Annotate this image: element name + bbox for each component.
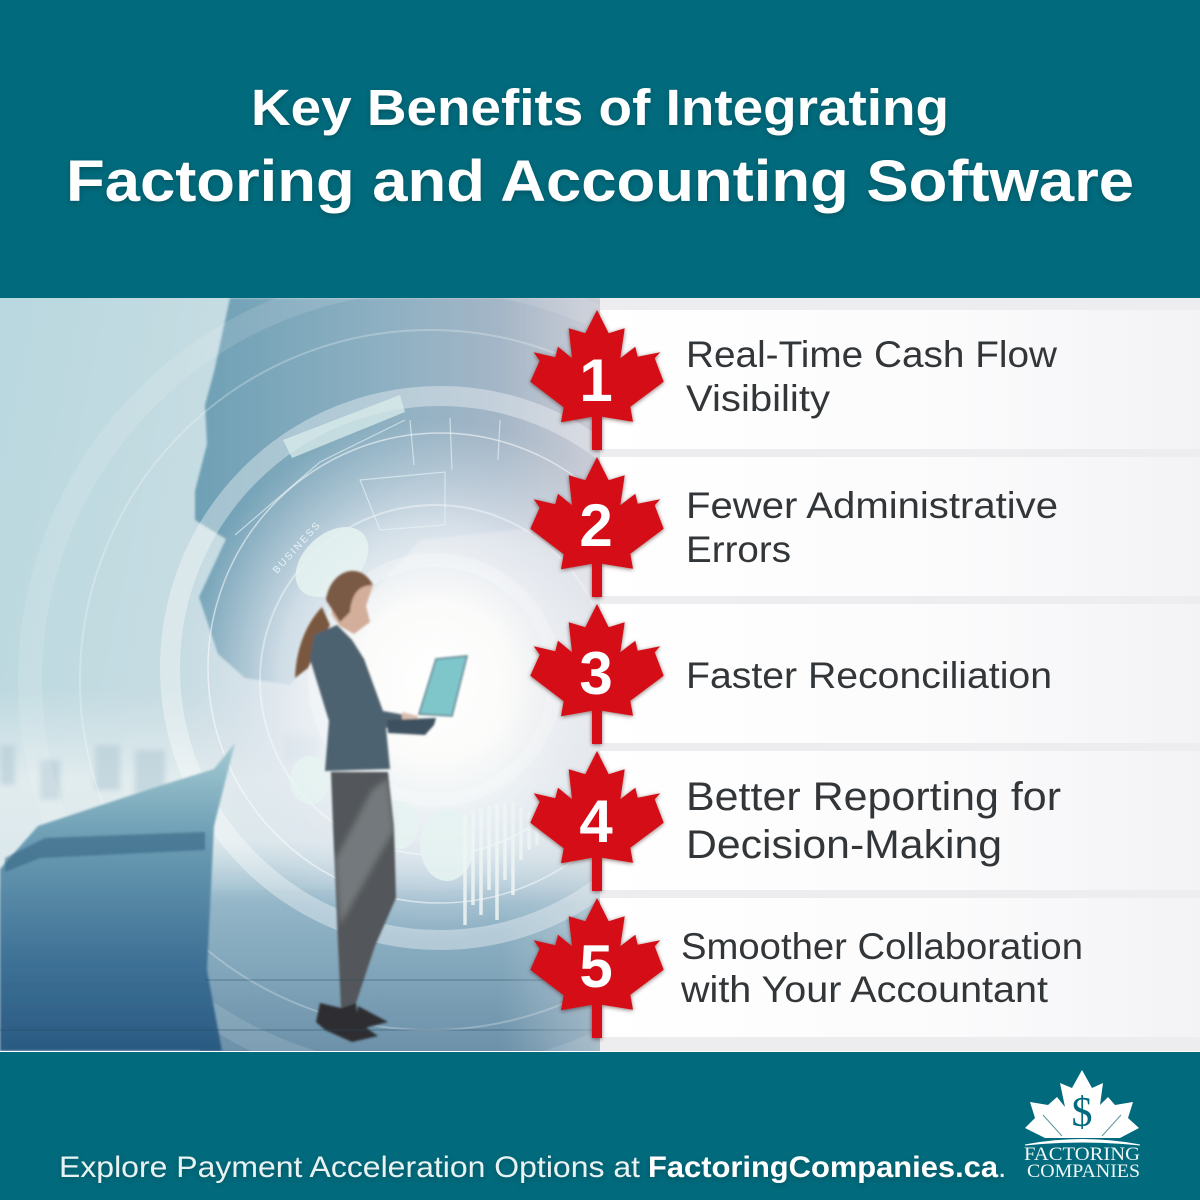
right-side fade <box>515 298 600 1051</box>
dashboard pie charts <box>296 527 471 881</box>
footer band <box>0 1052 1200 1200</box>
logo wordmark: COMPANIES <box>1027 1161 1140 1182</box>
icon: maple leaf 5 <box>530 898 664 1038</box>
row 1 text: Real-Time Cash Flow <box>686 334 1057 375</box>
icon: maple leaf 2: 2 <box>579 492 613 559</box>
title: Factoring and Accounting Software <box>66 149 1134 214</box>
title <box>66 79 1134 214</box>
row 2 panel <box>600 457 1200 596</box>
title: Key Benefits of Integrating <box>251 79 949 136</box>
bottom floor lines <box>0 980 640 1030</box>
row 1 text: Visibility <box>686 378 831 419</box>
icon: maple leaf 5: 5 <box>579 933 613 1000</box>
dashboard tab <box>283 395 405 458</box>
shoes <box>316 1003 388 1042</box>
row 4 text: Decision-Making <box>686 823 1002 867</box>
row 4 text: Better Reporting for <box>686 775 1061 819</box>
row 1 panel <box>600 310 1200 449</box>
row 3 panel <box>600 604 1200 743</box>
footer call to action: FactoringCompanies.ca <box>648 1151 998 1184</box>
shoulder silhouette <box>0 743 235 1051</box>
distant city blocks <box>0 744 166 801</box>
icon: maple leaf 3 <box>530 604 664 744</box>
logo: Factoring Companies <box>1024 1070 1140 1182</box>
row 1 text <box>686 334 1057 419</box>
dashboard panel lines <box>235 418 500 535</box>
row 3 text: Faster Reconciliation <box>686 655 1052 696</box>
holographic rings <box>79 298 600 1051</box>
floor <box>200 849 600 1051</box>
trouser light streak <box>335 778 394 925</box>
dashboard bar chart <box>463 820 538 925</box>
logo wordmark: FACTORING <box>1024 1144 1140 1165</box>
row 4 text <box>686 775 1061 867</box>
hands <box>400 711 419 722</box>
woman <box>295 571 467 1042</box>
head and hair <box>330 571 373 634</box>
photo: businesswoman with laptop over holographic dashboard <box>0 298 600 1051</box>
logo leaf <box>1025 1070 1139 1138</box>
row 5 text: Smoother Collaboration <box>681 926 1083 967</box>
row 2 text: Fewer Administrative <box>686 485 1058 526</box>
icon: maple leaf 4 <box>530 751 664 891</box>
logo arc <box>1025 1140 1140 1145</box>
icon: maple leaf 1: 1 <box>579 347 613 414</box>
row 2 text <box>686 485 1058 570</box>
icon: maple leaf 2 <box>530 457 664 597</box>
icon: maple leaf 4: 4 <box>579 788 613 855</box>
logo dollar sign: $ <box>1072 1090 1092 1136</box>
logo wordmark <box>1024 1144 1140 1182</box>
row 5 text <box>680 926 1083 1010</box>
jacket <box>310 625 405 771</box>
ponytail <box>295 607 330 678</box>
row 5 panel <box>600 898 1200 1037</box>
dashboard label: BUSINESS <box>271 519 324 576</box>
laptop <box>419 656 467 716</box>
trousers <box>331 772 396 1008</box>
icon: maple leaf 3: 3 <box>579 640 613 707</box>
row 4 panel <box>600 751 1200 890</box>
footer call to action: Explore Payment Acceleration Options at <box>59 1151 641 1184</box>
central light glow <box>201 437 590 924</box>
footer call to action: . <box>998 1151 1006 1184</box>
row 2 text: Errors <box>686 529 791 570</box>
skyline haze <box>0 713 333 890</box>
icon: maple leaf 1 <box>530 310 664 450</box>
logo veins <box>1043 1115 1121 1136</box>
large head silhouette <box>195 298 610 685</box>
header band <box>0 0 1200 298</box>
row 5 text: with Your Accountant <box>680 969 1049 1010</box>
